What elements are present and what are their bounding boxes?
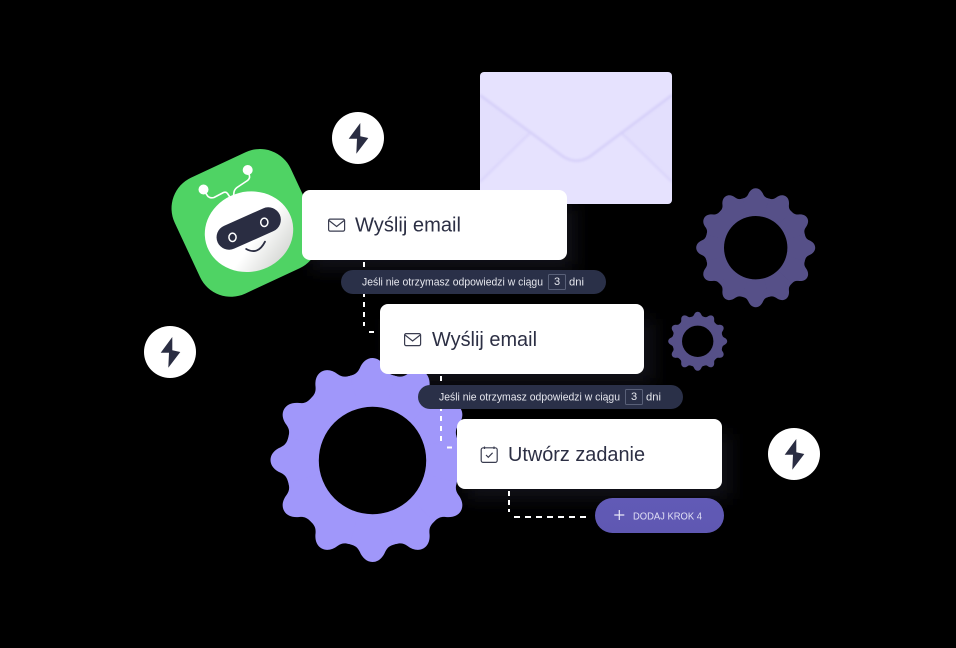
card: send email 1: Wyślij email [355, 214, 461, 236]
card: send email 2: Wyślij email [432, 329, 537, 351]
connector: step 3 to add step [509, 491, 590, 517]
icon: robot [160, 138, 330, 308]
card: create task [457, 419, 722, 489]
card: send email 2 [380, 304, 644, 374]
pill: condition 1: 3 [554, 276, 560, 288]
button: add step 4 [595, 498, 724, 533]
icon: calendar check [481, 446, 497, 462]
connector: step 2 to step 3 [441, 376, 452, 448]
gear: small dark [668, 312, 727, 371]
pill: condition 2 [418, 385, 683, 409]
connector: step 1 to step 2 [364, 262, 374, 332]
pill: condition 1: dni [569, 277, 584, 289]
gear: large dark [696, 188, 815, 307]
icon: envelope [480, 72, 672, 204]
card glow [310, 205, 730, 499]
button: add step 4: DODAJ KROK 4 [633, 510, 702, 522]
pill: condition 2: Jeśli nie otrzymasz odpowiedzi w ciągu [439, 392, 620, 404]
icon: mail [405, 334, 421, 346]
icon: lightning right [768, 428, 820, 480]
pill: condition 2: dni [646, 392, 661, 404]
icon: lightning left [144, 326, 196, 378]
pill: condition 1 [341, 270, 606, 294]
icon: lightning top [332, 112, 384, 164]
icon: mail [329, 219, 345, 231]
pill: condition 1: Jeśli nie otrzymasz odpowiedzi w ciągu [362, 277, 543, 289]
pill: condition 2: 3 [631, 391, 637, 403]
card: create task: Utwórz zadanie [508, 444, 645, 466]
gear: main purple [270, 358, 474, 562]
card: send email 1 [302, 190, 567, 260]
